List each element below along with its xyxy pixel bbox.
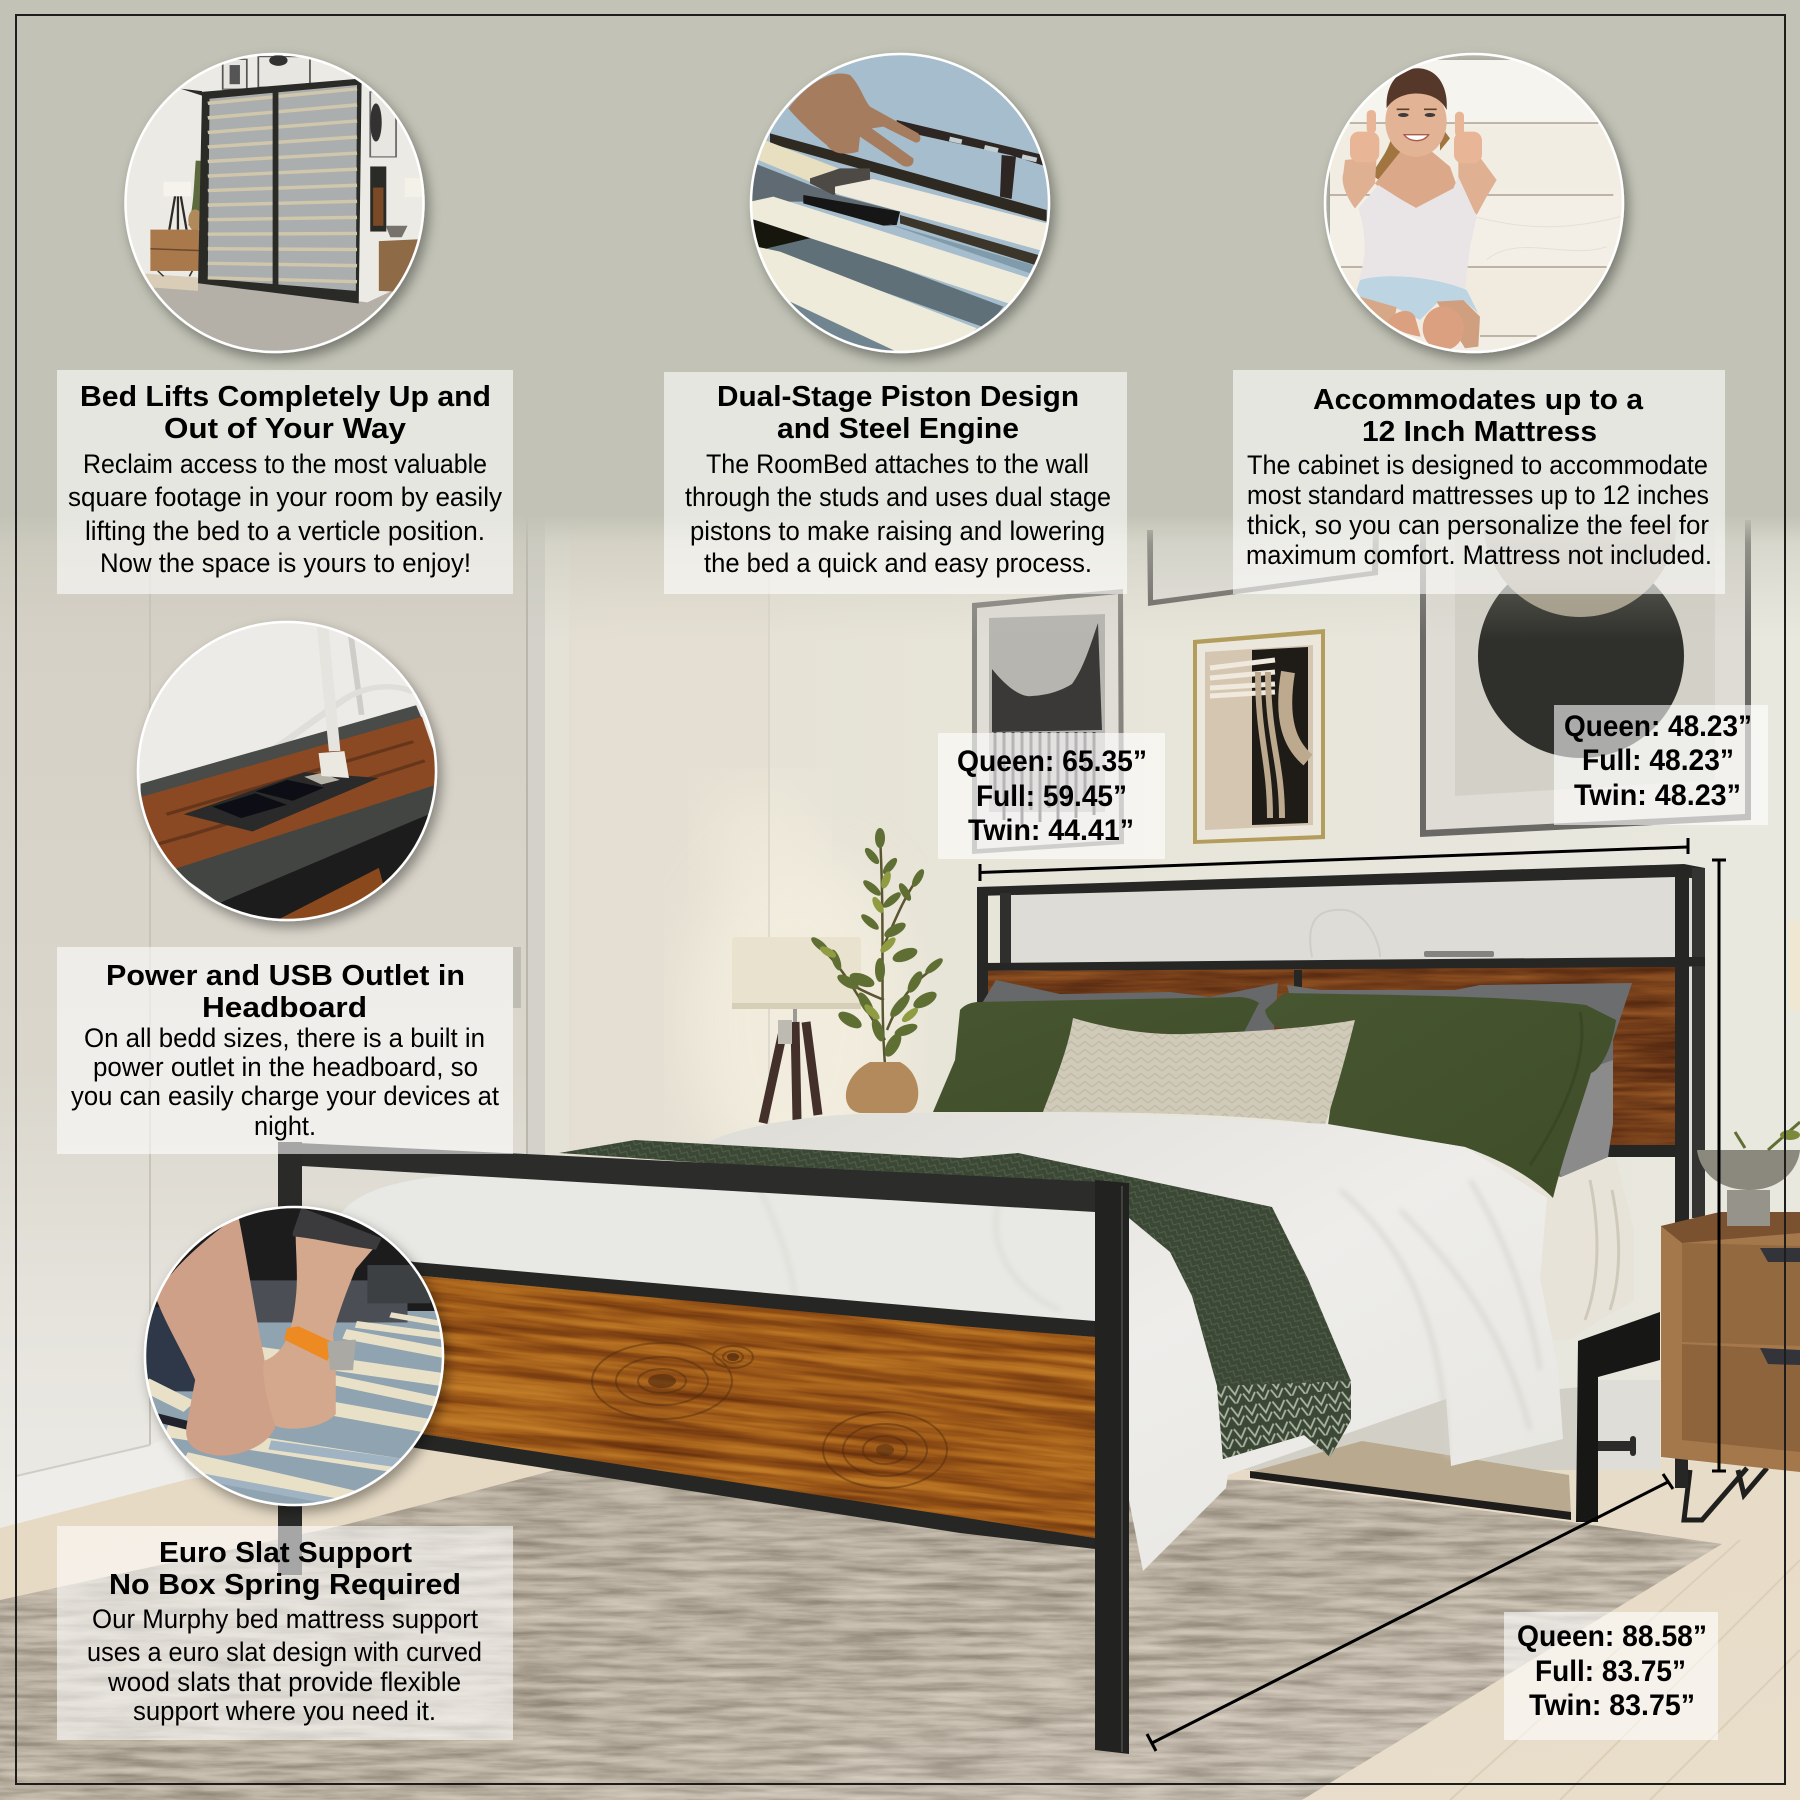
heading: piston design: and Steel Engine <box>777 413 1019 445</box>
dimension label: width <box>938 733 1165 859</box>
grey back pillows <box>960 980 1632 1177</box>
cream pillow <box>1043 1018 1355 1125</box>
heading: piston design <box>717 381 1079 445</box>
circle photo: bed lifted up <box>120 50 436 360</box>
body: bed lifts: lifting the bed to a verticle position. <box>85 516 485 546</box>
body: euro slat: wood slats that provide flexible <box>107 1667 461 1697</box>
plant in vase <box>809 828 945 1113</box>
body: mattress: thick, so you can personalize the feel for <box>1247 510 1709 540</box>
heading: mattress <box>1313 384 1644 448</box>
wall art: tapestry print <box>972 589 1124 854</box>
body: piston design: through the studs and uses dual stage <box>685 482 1111 512</box>
panel: mattress <box>1233 370 1725 594</box>
duvet <box>340 1112 1563 1571</box>
wall art: gold framed print <box>1193 629 1325 844</box>
under bed frame and wall shadow <box>1230 1312 1660 1522</box>
wall art: top frame <box>1147 530 1379 606</box>
body: piston design: the bed a quick and easy process. <box>704 548 1092 578</box>
nightstand with bowl and sprig <box>1661 1122 1800 1520</box>
heading: euro slat: No Box Spring Required <box>109 1569 461 1601</box>
circle photo: power outlet <box>132 615 445 925</box>
heading: euro slat <box>109 1537 461 1601</box>
heading: mattress: 12 Inch Mattress <box>1362 416 1597 448</box>
rug <box>0 1470 1722 1800</box>
body: piston design: pistons to make raising and lowering <box>690 516 1105 546</box>
dimension line: height <box>1712 860 1726 1471</box>
body: mattress: The cabinet is designed to accommodate <box>1247 450 1708 480</box>
circle photo: piston and slats <box>750 54 1050 355</box>
floor <box>0 1420 1800 1800</box>
body: mattress: maximum comfort. Mattress not included. <box>1246 540 1712 570</box>
green throw blanket <box>559 1140 1351 1459</box>
heading: power outlet <box>106 960 465 1024</box>
wall art: large circle print <box>1420 423 1751 837</box>
body: power outlet: power outlet in the headboard, so <box>93 1052 478 1082</box>
dimension line: headboard width <box>980 838 1688 881</box>
body: mattress: most standard mattresses up to 12 inches <box>1247 480 1709 510</box>
panel: power outlet <box>57 947 513 1154</box>
heading: bed lifts: Bed Lifts Completely Up and <box>80 381 491 413</box>
dimension label: width: Queen: 65.35” <box>957 745 1147 778</box>
dimension label: length: Full: 83.75” <box>1535 1655 1686 1688</box>
heading: euro slat: Euro Slat Support <box>159 1537 412 1569</box>
heading: power outlet: Power and USB Outlet in <box>106 960 465 992</box>
body: euro slat <box>87 1604 482 1726</box>
circle photo: woman on mattress <box>1325 54 1630 360</box>
body: power outlet: night. <box>254 1111 316 1141</box>
circle photo: euro slats <box>138 1204 448 1510</box>
body: power outlet: you can easily charge your devices at <box>71 1081 500 1111</box>
green pillows <box>933 993 1616 1198</box>
dimension label: height: Twin: 48.23” <box>1574 779 1741 812</box>
mattress side <box>1500 1158 1634 1340</box>
body: bed lifts <box>68 449 503 578</box>
heading: power outlet: Headboard <box>202 992 367 1024</box>
bed: headboard <box>960 864 1705 1226</box>
body: euro slat: Our Murphy bed mattress support <box>92 1604 479 1634</box>
dimension label: height <box>1554 705 1768 825</box>
heading: piston design: Dual-Stage Piston Design <box>717 381 1079 413</box>
dimension label: length <box>1504 1612 1718 1740</box>
body: mattress <box>1246 450 1712 570</box>
body: power outlet: On all bedd sizes, there is a built in <box>84 1023 485 1053</box>
dimension label: height: Queen: 48.23” <box>1564 710 1752 743</box>
body: bed lifts: Now the space is yours to enjoy! <box>100 548 471 578</box>
heading: bed lifts <box>80 381 491 445</box>
panel: bed lifts <box>57 370 513 594</box>
body: power outlet <box>71 1023 500 1141</box>
dimension line: length <box>1147 1474 1673 1751</box>
panel: euro slat <box>57 1526 513 1740</box>
bed: footboard <box>263 1142 1149 1754</box>
body: bed lifts: Reclaim access to the most valuable <box>83 449 487 479</box>
dimension label: length: Twin: 83.75” <box>1529 1689 1695 1722</box>
heading: mattress: Accommodates up to a <box>1313 384 1644 416</box>
dimension label: width: Full: 59.45” <box>976 780 1127 813</box>
table lamp <box>732 937 861 1123</box>
dimension label: length: Queen: 88.58” <box>1517 1620 1707 1653</box>
dimension label: width: Twin: 44.41” <box>968 814 1134 847</box>
body: piston design <box>685 449 1111 578</box>
panel: piston design <box>664 372 1127 594</box>
body: euro slat: uses a euro slat design with curved <box>87 1637 482 1667</box>
body: bed lifts: square footage in your room by easily <box>68 482 503 512</box>
body: euro slat: support where you need it. <box>133 1696 436 1726</box>
dimension label: height: Full: 48.23” <box>1582 744 1734 777</box>
room background <box>0 480 1800 1580</box>
body: piston design: The RoomBed attaches to the wall <box>706 449 1089 479</box>
sage top fade <box>0 0 1800 640</box>
heading: bed lifts: Out of Your Way <box>164 413 406 445</box>
